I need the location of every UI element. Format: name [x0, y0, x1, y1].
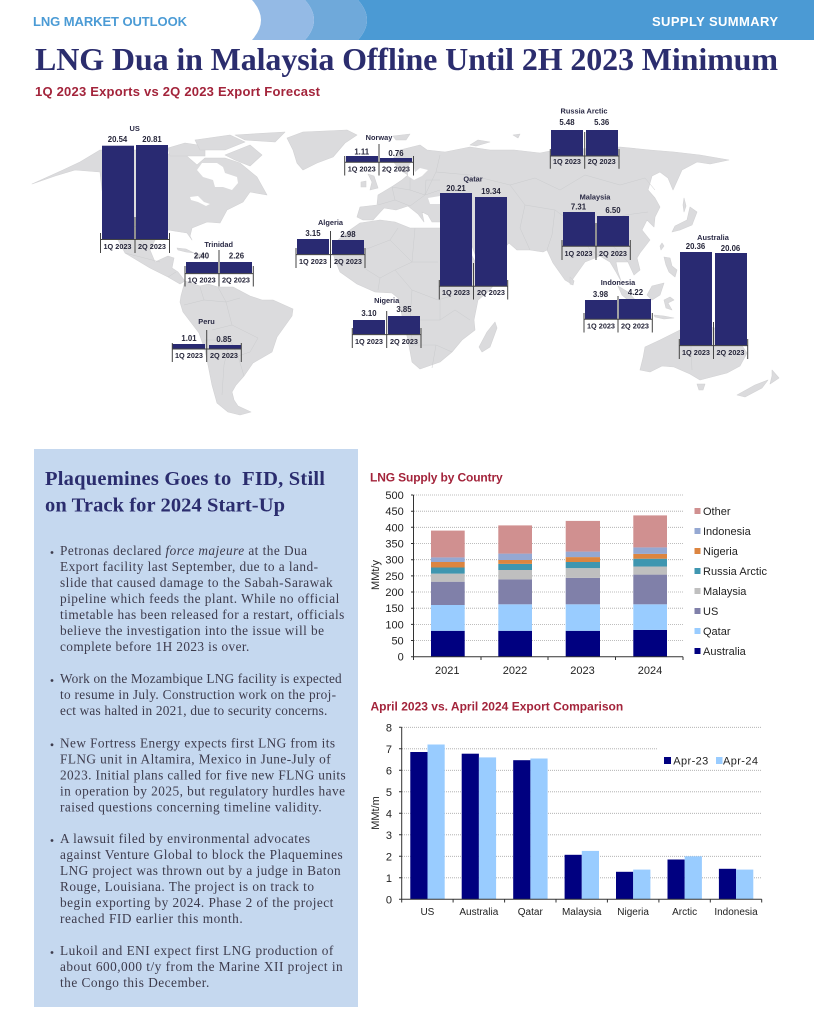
chart: Peru: 0.85 [216, 335, 232, 344]
chart: Qatar: 2Q 2023 [477, 288, 505, 297]
chart: Algeria: 2Q 2023 [334, 257, 362, 266]
x axis labels: 2022 [503, 665, 527, 677]
y axis labels: 300 [385, 555, 404, 567]
x axis labels: Qatar [518, 907, 543, 918]
y axis labels: 450 [385, 506, 404, 518]
y axis labels: 250 [385, 571, 404, 583]
chart: Algeria: 3.15 [305, 229, 321, 238]
Borneo [647, 283, 664, 300]
chart: Russia Arctic: 5.36 [594, 118, 610, 127]
chart: Trinidad: 1Q 2023 [188, 276, 216, 284]
bullet: Petronas: timetable has been released for a restart, officials [60, 607, 344, 622]
y axis labels [385, 490, 404, 664]
legend: Apr-23 [673, 756, 708, 768]
chart: Malaysia: Malaysia [580, 192, 611, 201]
bullet: Mozambique: to resume in July. Construction work on the proj- [60, 687, 336, 702]
chart: Algeria: 1Q 2023 [299, 257, 327, 266]
chart: Australia: 2Q 2023 [716, 348, 744, 357]
Sakhalin [683, 198, 686, 212]
stacked bar chart: LNG supply by country [370, 490, 768, 677]
chart: Russia Arctic: 5.48 [559, 118, 575, 127]
chart: Algeria: Algeria [318, 218, 344, 227]
bullet: lawsuit: A lawsuit filed by environmental advocates [60, 831, 310, 846]
x axis labels: Australia [459, 907, 499, 918]
bullet: Petronas: Export facility last September, due to a land- [60, 559, 318, 574]
subtitle: 1Q 2023 Exports vs 2Q 2023 Export Forecast [35, 84, 321, 99]
x axis labels: Indonesia [714, 907, 758, 918]
chart: Peru: Peru [198, 317, 215, 326]
x axis labels: 2024 [638, 665, 662, 677]
Arctic islands [168, 143, 205, 156]
bullet: New Fortress: 2023. Initial plans called for five new FLNG units [60, 767, 346, 782]
chart: Indonesia: Indonesia [601, 278, 636, 287]
chart: Qatar: 19.34 [481, 187, 501, 196]
x axis labels: 2023 [570, 665, 595, 677]
bars 2024 [633, 515, 667, 657]
chart: Trinidad: 2Q 2023 [222, 276, 250, 284]
bullet: Mozambique: Work on the Mozambique LNG facility is expected [60, 671, 342, 686]
y axis labels: 3 [386, 830, 392, 842]
y axis labels: 0 [398, 652, 404, 664]
chart: Norway: 1Q 2023 [348, 164, 376, 174]
chart: Nigeria: 3.10 [361, 309, 377, 318]
y axis labels: 100 [385, 619, 404, 631]
y axis labels: 0 [386, 894, 392, 906]
legend: Australia [703, 646, 747, 658]
chart: Malaysia [562, 192, 630, 260]
bullet: New Fortress: in operation by 2025, but regulatory hurdles have [60, 783, 345, 798]
bullet: New Fortress: New Fortress Energy expects first LNG from its [60, 735, 335, 750]
chart: Malaysia: 6.50 [605, 206, 621, 215]
bullet: Petronas: slide that caused damage to the Sabah-Sarawak [60, 575, 333, 590]
chart: US [100, 124, 170, 253]
chart: Australia [679, 233, 748, 359]
Great Lakes [190, 196, 210, 206]
y axis labels: 350 [385, 538, 404, 550]
bullet: lawsuit: begin exporting by 2024. Phase 2 of the project [60, 895, 334, 910]
Africa [332, 220, 505, 369]
bullet: Petronas [51, 543, 344, 654]
bullet: lawsuit: LNG project was thrown out by a judge in Baton [60, 863, 341, 878]
title: LNG Dua in Malaysia Offline Until 2H 2023 Minimum [35, 41, 778, 77]
bullet: lawsuit: reached FID earlier this month. [60, 911, 243, 926]
chart: Trinidad [185, 240, 253, 286]
y axis labels: 150 [385, 603, 404, 615]
chart: Nigeria [352, 296, 421, 348]
y axis labels: 7 [386, 744, 392, 756]
chart: Australia: Australia [697, 233, 730, 242]
bars 2021 [431, 531, 465, 657]
legend: Other [703, 506, 731, 518]
bars Apr-23 [410, 752, 736, 899]
y axis labels [386, 722, 392, 906]
x axis labels [420, 907, 758, 918]
y axis labels: 1 [386, 873, 392, 885]
country borders [125, 253, 258, 395]
bullet: lawsuit [51, 831, 343, 926]
y axis title: MMt/y [370, 560, 382, 590]
chart: Malaysia: 1Q 2023 [564, 249, 592, 258]
y axis labels: 6 [386, 765, 392, 777]
legend: Malaysia [703, 586, 747, 598]
chart: Norway: 2Q 2023 [382, 164, 410, 174]
Taiwan [660, 243, 664, 250]
y axis labels: 8 [386, 722, 392, 734]
legend: Apr-24 [723, 756, 758, 768]
chart: Russia Arctic: 2Q 2023 [588, 157, 616, 166]
New Zealand [770, 370, 779, 384]
chart: Indonesia: 1Q 2023 [587, 322, 615, 330]
chart: Australia: 20.06 [721, 244, 741, 253]
chart: Qatar [439, 175, 508, 300]
y axis labels: 200 [385, 587, 404, 599]
y axis labels: 500 [385, 490, 404, 502]
legend: Qatar [703, 626, 731, 638]
chart: Algeria [296, 218, 365, 268]
y axis labels: 50 [391, 636, 404, 648]
chart: US: 20.54 [108, 135, 128, 144]
bars 2023 [566, 521, 600, 657]
y axis labels: 400 [385, 522, 404, 534]
bullet: Lukoil [51, 943, 343, 990]
South America [180, 281, 293, 415]
chart: Australia: 1Q 2023 [682, 348, 710, 357]
Japan [672, 207, 697, 232]
chart: US: US [130, 124, 140, 133]
chart: US: 20.81 [142, 135, 162, 144]
legend: Nigeria [703, 546, 739, 558]
bullet: lawsuit: against Venture Global to block the Plaquemines [60, 847, 343, 862]
chart: Russia Arctic: 1Q 2023 [553, 157, 581, 166]
chart: Nigeria: 3.85 [396, 305, 412, 314]
Eurasia [357, 145, 729, 283]
bullet: Lukoil: about 600,000 t/y from the Marine XII project in [60, 959, 343, 974]
chart: Peru [172, 317, 241, 362]
chart: Indonesia: 4.22 [628, 288, 644, 297]
bullet: Mozambique: ect was halted in 2021, due to security concerns. [60, 703, 327, 718]
chart: Qatar: 1Q 2023 [442, 288, 470, 297]
chart: Peru: 2Q 2023 [210, 351, 238, 360]
chart: Qatar: 20.21 [446, 184, 466, 193]
x axis labels: Arctic [672, 907, 697, 918]
chart: Nigeria: 1Q 2023 [355, 337, 383, 346]
chart: Trinidad: 2.26 [229, 252, 245, 261]
Greenland [287, 130, 357, 170]
x axis labels: US [420, 907, 435, 918]
chart: Norway [345, 133, 414, 176]
Sumatra [618, 286, 640, 305]
x axis labels [435, 665, 662, 677]
Hudson Bay [197, 163, 238, 190]
chart: Indonesia: 2Q 2023 [621, 322, 649, 330]
y axis labels: 2 [386, 851, 392, 863]
y axis title: MMt/m [370, 796, 382, 830]
bullet: Petronas: believe the investigation into the issue will be [60, 623, 324, 638]
y axis labels: 5 [386, 787, 392, 799]
header banner [33, 0, 814, 40]
world map [32, 130, 779, 415]
Philippines [664, 257, 677, 277]
chart: US: 1Q 2023 [104, 242, 132, 251]
bullet: Petronas: Petronas declared force majeure at the Dua [60, 543, 307, 558]
chart: Peru: 1Q 2023 [175, 351, 203, 360]
Tasmania [697, 384, 705, 390]
legend: Indonesia [703, 526, 752, 538]
chart: Algeria: 2.98 [340, 230, 356, 239]
heading: LNG Supply by Country: LNG Supply by Country [370, 471, 503, 485]
Sulawesi [664, 297, 674, 310]
chart: Peru: 1.01 [181, 334, 197, 343]
bullet: New Fortress: raised questions concerning timeline validity. [60, 799, 322, 814]
chart: Nigeria: 2Q 2023 [390, 337, 418, 346]
x axis labels: Nigeria [617, 907, 649, 918]
Sri Lanka [570, 277, 574, 285]
legend [694, 506, 768, 658]
chart: Norway: Norway [366, 133, 393, 142]
bars 2022 [498, 525, 532, 657]
Baltic and inland seas [408, 160, 428, 180]
chart: Norway: 1.11 [354, 148, 370, 156]
Svalbard and Arctic Russia islands [393, 134, 410, 140]
Madagascar [479, 322, 497, 352]
bullet: Petronas: pipeline which feeds the plant. While no official [60, 591, 340, 606]
bullet: New Fortress [51, 735, 346, 814]
chart: Malaysia: 2Q 2023 [599, 249, 627, 258]
bullet: Lukoil: Lukoil and ENI expect first LNG production of [60, 943, 334, 958]
bullet: Mozambique [51, 671, 342, 718]
chart: Russia Arctic [550, 107, 619, 169]
x axis labels: 2021 [435, 665, 460, 677]
Java [654, 315, 674, 319]
y axis labels: 4 [386, 808, 392, 820]
chart: Russia Arctic: Russia Arctic [561, 107, 607, 116]
chart: Trinidad: 2.40 [194, 252, 210, 261]
bullet: Lukoil: the Congo this December. [60, 975, 209, 990]
heading: April comparison: April 2023 vs. April 2024 Export Comparison [370, 700, 623, 714]
chart: Australia: 20.36 [686, 242, 706, 251]
panel heading [45, 468, 325, 517]
bars Apr-24 [428, 744, 753, 899]
chart: Malaysia: 7.31 [571, 202, 587, 211]
Australia [640, 325, 747, 380]
panel: Plaquemines text [34, 449, 358, 1007]
British Isles [368, 174, 378, 190]
legend: US [703, 606, 718, 618]
column chart: April 2023 vs April 2024 exports [370, 722, 762, 918]
bullet: lawsuit: Rouge, Louisiana. The project is on track to [60, 879, 314, 894]
header banner: LNG MARKET OUTLOOK [33, 14, 188, 29]
panel heading: Plaquemines Goes to FID, Still [45, 468, 325, 490]
header banner: SUPPLY SUMMARY [652, 14, 778, 29]
chart: Nigeria: Nigeria [374, 296, 400, 305]
bullet: Petronas: complete before 1H 2023 is over. [60, 639, 249, 654]
chart: Qatar: Qatar [463, 175, 483, 184]
legend: Russia Arctic [703, 566, 768, 578]
chart: Indonesia [584, 278, 652, 332]
chart: Trinidad: Trinidad [204, 240, 234, 249]
bullet: New Fortress: FLNG unit in Altamira, Mexico in June-July of [60, 751, 331, 766]
chart: Indonesia: 3.98 [593, 290, 609, 299]
legend [664, 756, 758, 768]
chart: US: 2Q 2023 [138, 242, 166, 251]
panel heading: on Track for 2024 Start-Up [45, 495, 285, 517]
North America [32, 150, 267, 284]
chart: Norway: 0.76 [388, 149, 404, 158]
x axis labels: Malaysia [562, 907, 602, 918]
